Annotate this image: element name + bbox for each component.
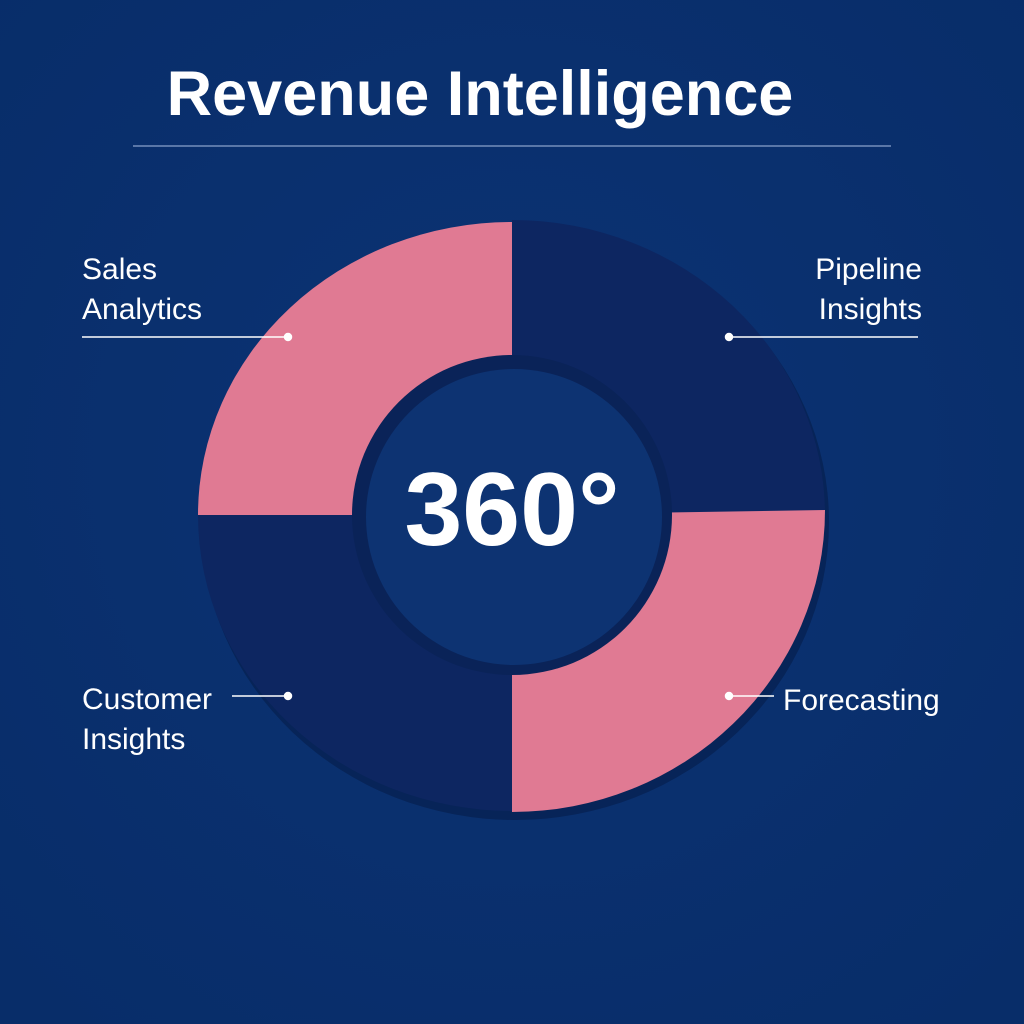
label: Forecasting: Forecasting xyxy=(783,684,940,717)
segment: Forecasting (pink bottom-right) xyxy=(512,510,825,812)
segment: Customer Insights (dark bottom-left) xyxy=(198,515,512,811)
label: Customer Insights: Customer xyxy=(82,683,212,716)
title underline xyxy=(133,145,891,147)
connector lines xyxy=(82,334,918,700)
label: Customer Insights: Insights xyxy=(82,723,185,756)
label: Customer Insights xyxy=(82,683,212,756)
segment: Sales Analytics (pink top-left) xyxy=(198,222,512,515)
label: Sales Analytics xyxy=(82,253,202,326)
segment: Pipeline Insights (dark top-right) xyxy=(512,220,825,515)
label: Pipeline Insights: Insights xyxy=(819,293,922,326)
label: Sales Analytics: Analytics xyxy=(82,293,202,326)
title: Revenue Intelligence xyxy=(167,59,793,129)
donut chart xyxy=(198,220,829,820)
label: Pipeline Insights xyxy=(815,253,922,326)
label: Pipeline Insights: Pipeline xyxy=(815,253,922,286)
center: 360°: 360° xyxy=(404,452,620,568)
label: Sales Analytics: Sales xyxy=(82,253,157,286)
